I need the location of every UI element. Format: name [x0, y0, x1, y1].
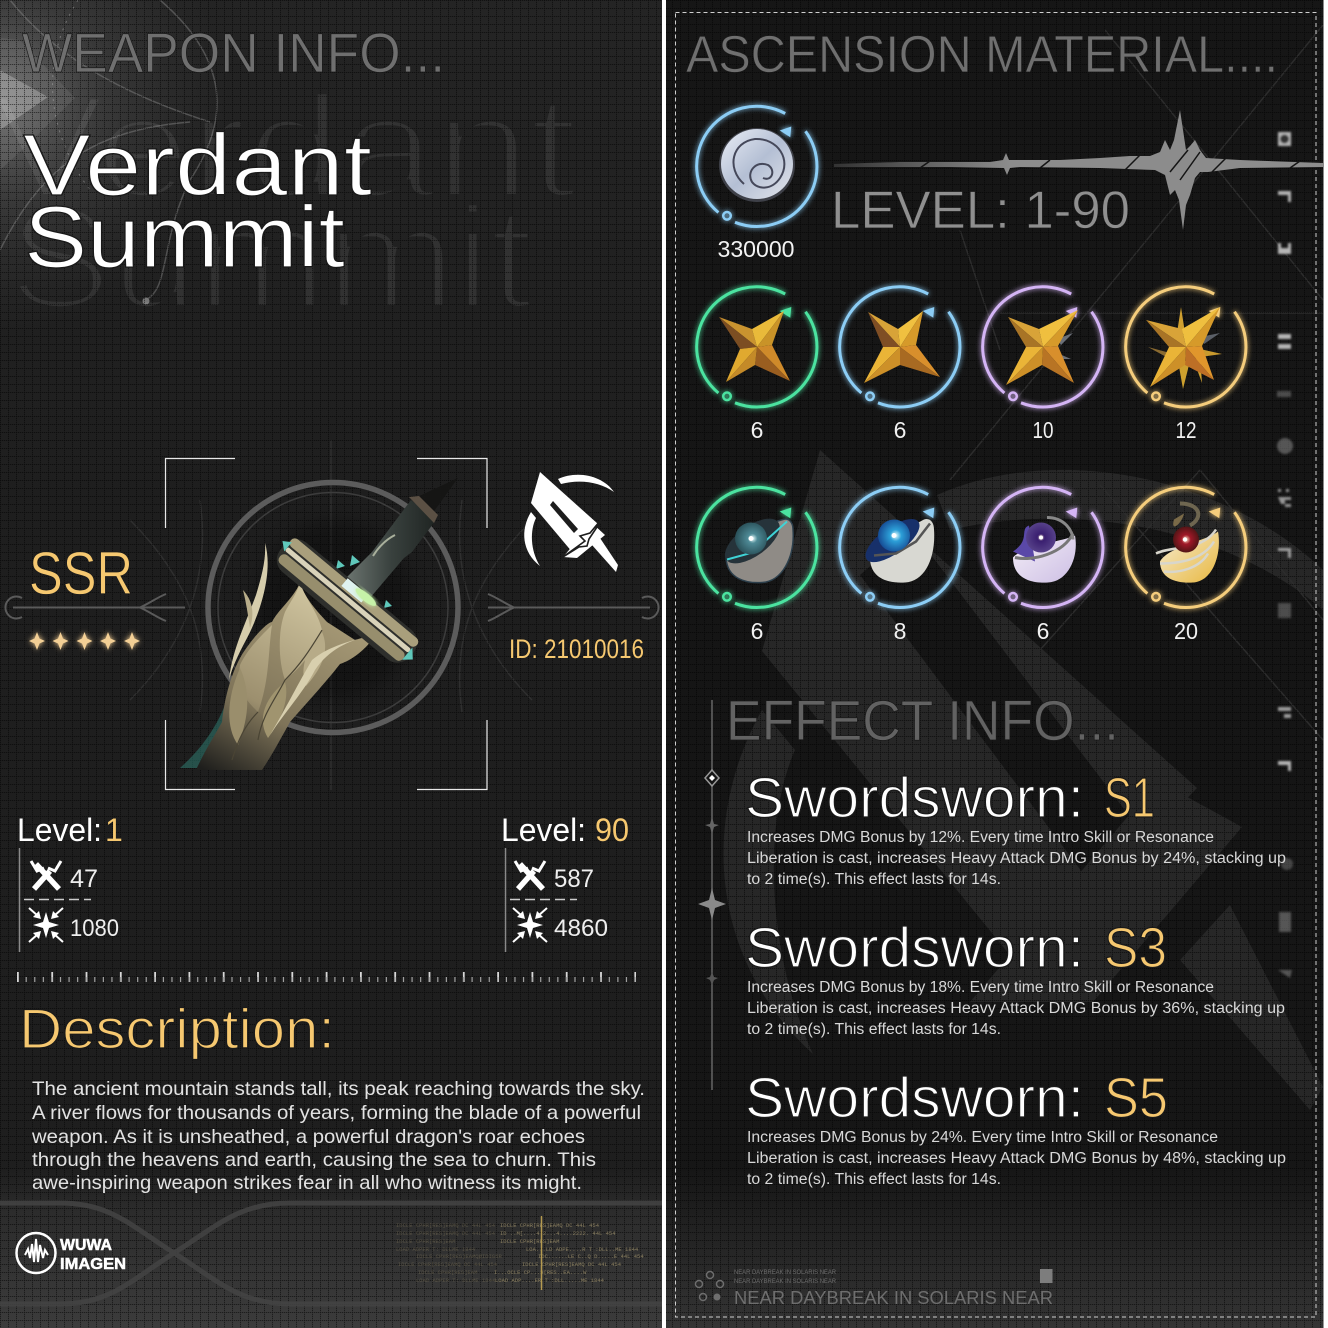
- effect: S3: Liberation is cast, increases Heavy Attack DMG Bonus by 36%, stacking up: [747, 1000, 1285, 1017]
- heading: effect info: EFFECT INFO...: [726, 689, 1119, 753]
- material: common star: 6: [751, 417, 763, 443]
- footer decoration: NEAR DAYBREAK IN SOLARIS NEAR: [734, 1279, 837, 1285]
- title: Summit: [24, 189, 345, 286]
- description text: through the heavens and earth, causing the sea to churn. This: [32, 1149, 596, 1171]
- logo: WUWA: [60, 1237, 112, 1254]
- log text block: LOA...LD ADPE....R T :DLL..ME 1844: [526, 1246, 639, 1253]
- icon: health: [29, 908, 63, 942]
- logo: IMAGEN: [60, 1256, 126, 1273]
- material: epic star: 10: [1032, 417, 1054, 443]
- timeline: [698, 700, 726, 1090]
- heading: description: Description:: [19, 997, 335, 1060]
- top-left glow and star motif: [0, 0, 240, 340]
- crossguard: [267, 530, 427, 672]
- blade of wheat leaves: [180, 543, 376, 770]
- effect: S1: to 2 time(s). This effect lasts for 14s.: [747, 871, 1001, 888]
- stats: level 90: Level:: [501, 812, 586, 848]
- ghost title: Summit: [8, 176, 533, 339]
- effect: S3: Swordsworn:: [745, 916, 1084, 980]
- heading: ascension material: ASCENSION MATERIAL....: [686, 26, 1278, 84]
- effect: S5: Increases DMG Bonus by 24%. Every time Intro Skill or Resonance: [747, 1129, 1218, 1146]
- stats: level 90: [501, 812, 629, 952]
- log text block: IDC......LE C..Q D.....E 44L 454: [538, 1253, 644, 1260]
- log text block: IDCLE CPHR[RES]EAMQ DC 44L 454: [398, 1261, 498, 1268]
- material: legendary orb: [1126, 487, 1246, 644]
- log text block: IDCLE CPHR[RES]EAMQ DC 44L 454: [522, 1261, 622, 1268]
- stats: level 90: 587: [554, 865, 594, 893]
- grid overlay: [0, 0, 662, 1328]
- center ornament lines: [130, 440, 532, 790]
- icon: weapon type sword: [524, 472, 618, 572]
- level range: LEVEL: 1-90: [831, 181, 1130, 240]
- rarity SSR: SSR: [29, 540, 133, 607]
- log text block: IDCLE CPHR[RES]EAM: [418, 1269, 477, 1276]
- description text: The ancient mountain stands tall, its peak reaching towards the sky.: [32, 1078, 645, 1100]
- description text: [31, 1078, 645, 1194]
- effect: S3: to 2 time(s). This effect lasts for 14s.: [747, 1021, 1001, 1038]
- effect: S5: S5: [1104, 1066, 1168, 1130]
- rarity stars: [29, 632, 140, 650]
- dashed border: [676, 12, 1316, 1317]
- log text block: I...OCLE CP...H[RES..EA....W: [494, 1269, 587, 1276]
- effect: S1: Swordsworn:: [745, 766, 1084, 830]
- effect: S3: Increases DMG Bonus by 18%. Every time Intro Skill or Resonance: [747, 979, 1214, 996]
- footer decoration: [696, 1269, 1053, 1308]
- log text block: [396, 1216, 644, 1290]
- effect: S1: S1: [1104, 766, 1155, 830]
- icon: attack: [515, 861, 545, 889]
- icon: health: [513, 908, 547, 942]
- panel: weapon info: [0, 0, 662, 1328]
- footer decoration: NEAR DAYBREAK IN SOLARIS NEAR: [734, 1288, 1053, 1308]
- description text: A river flows for thousands of years, forming the blade of a powerful: [32, 1102, 641, 1124]
- log text block: IDCLE CPHR[RES]EAM: [396, 1238, 455, 1245]
- logo: [16, 1233, 126, 1273]
- material: epic orb: [983, 487, 1103, 644]
- effect: S3: S3: [1104, 916, 1167, 980]
- log text block: LOAD ADP....ER T :DLL.....ME 1844: [495, 1277, 605, 1284]
- material: epic orb: 6: [1037, 618, 1049, 644]
- material: common star: [697, 287, 817, 443]
- background emblem: [723, 450, 1323, 1110]
- effect: S1: [745, 766, 1286, 888]
- ghost title: [0, 65, 577, 339]
- log text block: IDCLE CPHR[RES]EAMQ@IDIG5R: [416, 1253, 503, 1260]
- effect: S5: [745, 1066, 1286, 1188]
- stats: level 1: 1080: [70, 915, 119, 942]
- ruler: [17, 977, 636, 980]
- footer decoration: NEAR DAYBREAK IN SOLARIS NEAR: [734, 1270, 837, 1276]
- material: epic star: [983, 287, 1103, 443]
- log text block: IDCLE CPHR[RES]EAMQ DC 44L 454: [396, 1230, 496, 1237]
- material: legendary star: 12: [1176, 417, 1196, 443]
- effect: S5: Liberation is cast, increases Heavy Attack DMG Bonus by 48%, stacking up: [747, 1150, 1286, 1167]
- material: credit coin: 330000: [718, 236, 794, 262]
- stats: level 1: 47: [70, 865, 98, 893]
- ghost title: Verdant: [0, 65, 577, 228]
- stats: level 90: 4860: [554, 915, 608, 942]
- title: Verdant: [23, 117, 372, 214]
- footer bands: [0, 1203, 662, 1304]
- material: rare orb: [840, 487, 960, 644]
- sword tip and handle: [336, 478, 458, 608]
- material: legendary star: [1126, 287, 1246, 443]
- stats: level 90: 90: [595, 812, 629, 848]
- heading: weapon info: WEAPON INFO...: [22, 21, 445, 84]
- material: rare star: 6: [894, 417, 906, 443]
- selection frame corners: [166, 458, 487, 790]
- effect: S5: to 2 time(s). This effect lasts for 14s.: [747, 1171, 1001, 1188]
- side ornaments: [5, 594, 659, 621]
- background thin lines: [950, 25, 1323, 740]
- material: legendary orb: 20: [1174, 618, 1198, 644]
- material: common orb: [697, 487, 817, 644]
- material: credit coin: [697, 106, 817, 262]
- effect: S1: Increases DMG Bonus by 12%. Every time Intro Skill or Resonance: [747, 829, 1214, 846]
- panel: ascension and effect info: [666, 0, 1324, 1328]
- scattered side glyphs: [1277, 132, 1293, 978]
- stats: level 1: [17, 812, 123, 952]
- effect: S1: Liberation is cast, increases Heavy Attack DMG Bonus by 24%, stacking up: [747, 850, 1286, 867]
- weapon id: ID: 21010016: [509, 634, 644, 664]
- stats: level 1: 1: [105, 812, 123, 848]
- description text: awe-inspiring weapon strikes fear in all who witness its might.: [32, 1172, 582, 1194]
- log text block: ID ..M[....4.2...4....2222. 44L 454: [500, 1230, 616, 1237]
- log text block: LOAD ADPER T: DLLME 1844: [396, 1246, 476, 1253]
- material: common orb: 6: [751, 618, 763, 644]
- log text block: IDCLE CPHR[RES]EAMQ DC 44L 454: [500, 1222, 600, 1229]
- log text block: IDCLE CPHR[RES]EAMQ DC 44L 454: [396, 1222, 496, 1229]
- icon: attack: [31, 861, 61, 889]
- description text: weapon. As it is unsheathed, a powerful dragon's roar echoes: [31, 1126, 585, 1148]
- stats: level 1: Level:: [17, 812, 102, 848]
- material: rare orb: 8: [894, 618, 906, 644]
- weapon illustration: [180, 478, 458, 770]
- title: [23, 117, 372, 286]
- log text block: LOAD ADPER T: DLLME 1844: [416, 1277, 496, 1284]
- grid overlay: [666, 0, 1324, 1328]
- log text block: IDCLE CPHR[RES]EAM: [500, 1238, 559, 1245]
- material: rare star: [840, 287, 960, 443]
- waveform: [834, 110, 1323, 230]
- effect: S3: [745, 916, 1285, 1038]
- effect: S5: Swordsworn:: [745, 1066, 1084, 1130]
